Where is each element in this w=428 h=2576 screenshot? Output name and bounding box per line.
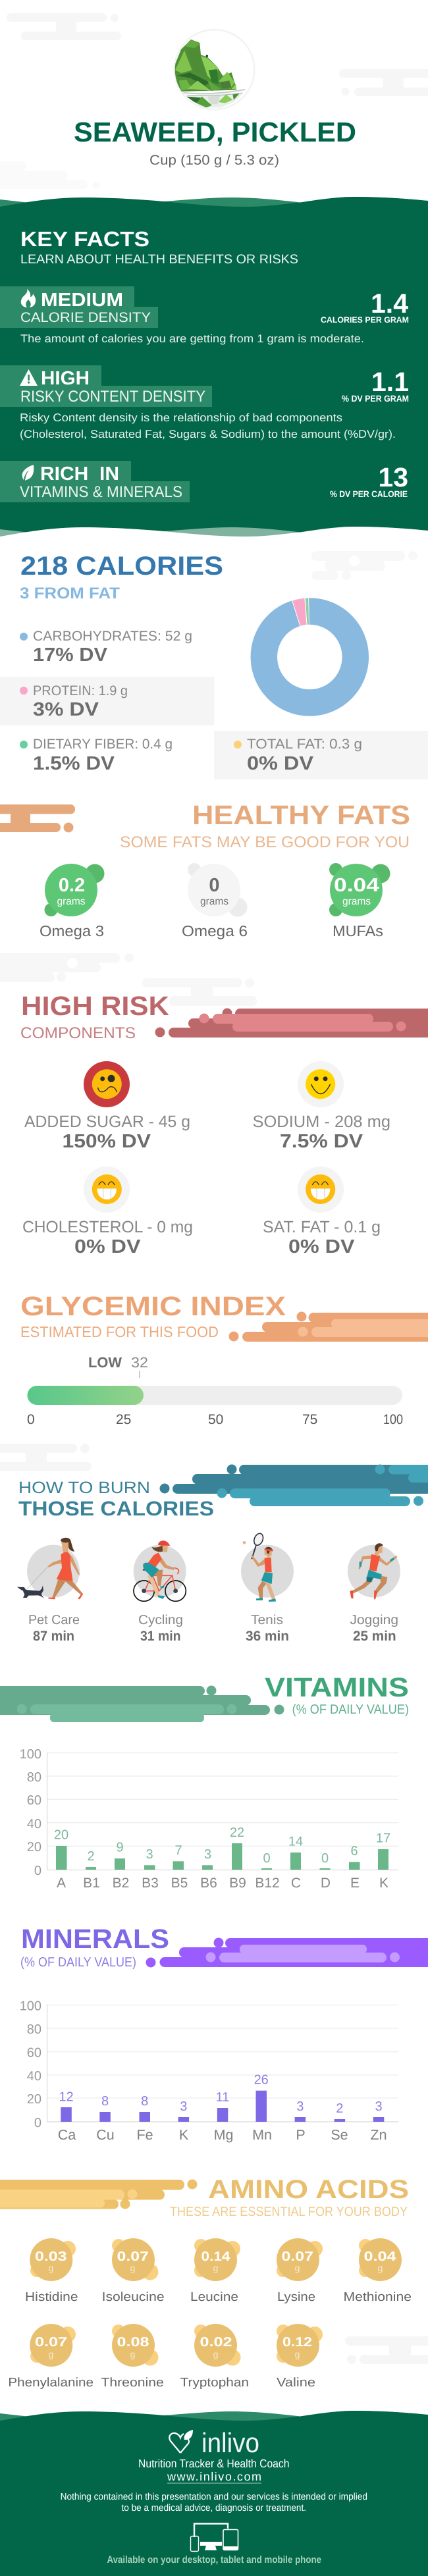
risk: sodium [253,1061,390,1152]
amino: histidine: g [49,2263,53,2273]
fact: rich in vitamins and minerals: VITAMINS & MINERALS [20,483,182,501]
legend: total fat: 0% DV [247,753,314,774]
disclaimer: to be a medical advice, diagnosis or treatment. [121,2503,306,2513]
risk: saturated fat [263,1167,381,1257]
activity: jogging: Jogging [350,1613,398,1627]
amino: lysine: g [295,2263,300,2273]
background cloud: burn [0,1444,92,1471]
amino: histidine: Histidine [25,2290,78,2304]
activity: pet care: 87 min [33,1629,74,1644]
fact: risky content density: (Cholesterol, Saturated Fat, Sugars & Sodium) to the amount (%DV/gr). [20,428,396,440]
amino: isoleucine: Isoleucine [102,2290,165,2304]
amino: histidine: 0.03 [35,2249,67,2264]
legend: dietary fiber [20,737,173,774]
amino: phenylalanine: g [49,2349,53,2359]
bar chart: vitamins: B12 [255,1876,280,1891]
bar chart: vitamins: 22 [230,1826,244,1840]
legend: protein: PROTEIN: 1.9 g [33,683,128,698]
bar chart: vitamins: E [350,1876,360,1891]
panel: high risk [20,991,428,1257]
icon: flame [21,289,36,307]
healthy fats heading: HEALTHY FATS [192,800,410,830]
activity: pet care: Pet Care [28,1613,80,1627]
title: SEAWEED, PICKLED [74,117,356,147]
glycemic index heading: GLYCEMIC INDEX [20,1291,286,1321]
heading [18,1479,214,1520]
bar chart: vitamins: 14 [288,1834,303,1849]
amino: valine [277,2324,323,2390]
legend: carbohydrates: 17% DV [33,644,108,666]
bar chart: minerals: Fe [136,2127,153,2143]
fact: risky content density: % DV PER GRAM [342,394,409,404]
fat: omega 6: Omega 6 [182,922,248,939]
glycemic bar [27,1386,403,1427]
legend: total fat: TOTAL FAT: 0.3 g [247,737,362,752]
legend: protein: 3% DV [33,699,99,720]
bar chart: vitamins: 20 [27,1840,41,1854]
amino acids heading: AMINO ACIDS [208,2175,409,2204]
bar chart: minerals [20,1999,398,2143]
bar chart: vitamins: B3 [142,1876,159,1891]
background cloud: high risk [0,953,257,1006]
fact: risky content density: RISKY CONTENT DENSITY [20,388,205,406]
key facts heading: KEY FACTS [20,227,149,251]
bar chart: vitamins: 3 [146,1847,153,1862]
fat: mufas: MUFAs [333,922,383,939]
bar chart: minerals: 20 [27,2092,41,2107]
bar chart: minerals: 8 [141,2094,148,2109]
bar chart: vitamins: 6 [350,1844,358,1858]
legend: carbohydrates: CARBOHYDRATES: 52 g [33,629,192,644]
amino: tryptophan: g [213,2349,218,2359]
amino: leucine: Leucine [190,2290,238,2304]
icon: woman walking dog [17,1538,83,1599]
bar chart: minerals: 26 [254,2072,269,2087]
fat: omega 3: 0.2 [59,875,85,896]
heading: THOSE CALORIES [18,1497,214,1520]
amino: phenylalanine: Phenylalanine [8,2376,94,2390]
bar chart: minerals: Se [331,2127,348,2143]
fat: mufas: 0.04 [334,875,379,896]
icon: cyclist [134,1540,186,1601]
calories from fat: 3 FROM FAT [20,585,120,602]
amino: methionine: 0.04 [363,2249,397,2264]
fact: risky content density: Risky Content density is the relationship of bad components [20,411,342,424]
bar chart: vitamins [20,1747,398,1891]
risk: added sugar: 150% DV [62,1131,151,1152]
panel: vitamins [0,1672,409,1891]
fact: risky content density: 1.1 [371,367,409,397]
vitamins subheading: (% OF DAILY VALUE) [292,1702,409,1717]
activity: pet care [17,1538,83,1644]
legend: protein [0,677,215,725]
bar chart: minerals: 100 [20,1999,41,2014]
bar chart: vitamins: K [379,1876,388,1891]
amino: lysine: 0.07 [282,2249,313,2264]
fact: rich in vitamins and minerals [0,461,408,502]
bar chart: vitamins: B1 [83,1876,100,1891]
amino acids subheading: THESE ARE ESSENTIAL FOR YOUR BODY [170,2205,408,2219]
header shape [159,1464,428,1506]
risk: added sugar: ADDED SUGAR - 45 g [24,1113,190,1131]
fat: omega 3 [40,864,104,939]
risk: saturated fat: SAT. FAT - 0.1 g [263,1218,381,1236]
panel: calories [0,552,428,779]
bar chart: minerals: 40 [27,2069,41,2084]
panel: food title header [74,30,356,168]
glycemic bar: 100 [383,1412,403,1427]
bar chart: minerals: Ca [58,2127,76,2143]
amino: threonine: Threonine [101,2376,164,2390]
healthy fats subheading: SOME FATS MAY BE GOOD FOR YOU [120,833,410,851]
fact: calorie density: MEDIUM [41,290,123,311]
risk: sodium: SODIUM - 208 mg [253,1113,390,1131]
amino: methionine [344,2238,412,2304]
risk: saturated fat: 0% DV [288,1236,355,1257]
background clouds: header [0,13,428,189]
bar chart: vitamins: 100 [20,1747,41,1762]
icon: heart with leaf [169,2430,193,2453]
background cloud: calories [311,551,417,580]
bar chart: vitamins: 80 [27,1770,41,1785]
glycemic value [88,1354,148,1378]
high risk subheading: COMPONENTS [20,1024,136,1042]
bar chart: minerals: Mn [252,2127,272,2143]
risk: cholesterol [22,1167,193,1257]
risk: added sugar [24,1061,190,1152]
fact: rich in vitamins and minerals: 13 [378,462,408,492]
amino: valine: g [295,2349,300,2359]
bar chart: vitamins: 0 [263,1851,271,1866]
amino: tryptophan: 0.02 [200,2335,232,2350]
amino: methionine: Methionine [344,2290,412,2304]
bar chart: minerals: 2 [336,2101,343,2116]
risk: sodium: 7.5% DV [280,1131,363,1152]
availability note: Available on your desktop, tablet and mobile phone [107,2554,321,2565]
amino: isoleucine: g [130,2263,135,2273]
fact: risky content density [0,365,409,440]
bar chart: vitamins: 17 [376,1831,390,1846]
bar chart: vitamins: B9 [229,1876,246,1891]
activity: tennis: Tenis [251,1613,283,1627]
bar chart: minerals: 3 [296,2099,304,2114]
glycemic value: 32 [131,1354,148,1371]
header shape [0,1685,284,1722]
amino: phenylalanine: 0.07 [35,2335,67,2350]
bar chart: minerals: 80 [27,2022,41,2037]
bar chart: vitamins: 40 [27,1817,41,1831]
amino: threonine: 0.08 [117,2335,149,2350]
activity: cycling [134,1540,186,1644]
amino: valine: Valine [277,2376,315,2390]
bar chart: minerals: 12 [59,2090,74,2104]
glycemic bar: 50 [208,1412,223,1427]
risk: cholesterol: CHOLESTEROL - 0 mg [22,1218,193,1236]
fat: omega 6: grams [200,896,228,907]
bar chart: vitamins: 7 [174,1843,182,1858]
key facts subheading: LEARN ABOUT HEALTH BENEFITS OR RISKS [20,252,298,267]
bar chart: minerals: 3 [180,2099,187,2114]
icon: tennis player [241,1532,294,1602]
vitamins heading: VITAMINS [265,1672,409,1702]
amino: leucine [190,2238,240,2304]
header shape [0,804,75,832]
activity: jogging [348,1543,400,1644]
bar chart: vitamins: B2 [113,1876,129,1891]
header shape [155,1009,428,1038]
amino: tryptophan: Tryptophan [180,2376,249,2390]
bar chart: vitamins: B6 [200,1876,217,1891]
logo: inlivo [201,2427,259,2458]
fat: mufas [329,863,390,939]
fact: calorie density: 1.4 [371,288,408,319]
minerals subheading: (% OF DAILY VALUE) [20,1955,136,1970]
panel: key facts [0,197,428,553]
activity: cycling: 31 min [140,1629,180,1644]
amino: threonine [101,2324,164,2390]
disclaimer: Nothing contained in this presentation and our services is intended or implied [61,2492,367,2502]
fact: rich in vitamins and minerals: % DV PER CALORIE [330,489,408,499]
fat: omega 6: 0 [209,875,220,896]
amino: tryptophan [180,2324,249,2390]
bar chart: minerals: Mg [214,2127,233,2143]
legend: total fat [214,731,428,779]
bar chart: minerals: Cu [96,2127,115,2143]
legend: carbohydrates [20,629,192,666]
bar chart: vitamins: A [57,1876,66,1891]
glycemic value: LOW [88,1354,122,1371]
fact: rich in vitamins and minerals: RICH IN [40,463,119,485]
donut chart [264,598,356,703]
bar chart: vitamins: 0 [321,1851,329,1866]
icon: jogger [348,1543,400,1600]
bar chart: vitamins: D [321,1876,331,1891]
fact: calorie density [0,286,409,345]
bar chart: vitamins: 2 [87,1849,95,1864]
logo [169,2427,259,2458]
fat: omega 6 [182,863,248,939]
amino: isoleucine [102,2238,165,2304]
bar chart: minerals: 3 [375,2099,383,2114]
header shape [146,1938,428,1967]
fact: calorie density: CALORIE DENSITY [20,310,151,325]
panel: minerals [20,1924,428,2143]
minerals heading: MINERALS [21,1924,169,1954]
header shape [229,1311,428,1342]
amino: phenylalanine [8,2324,94,2390]
amino: isoleucine: 0.07 [117,2249,149,2264]
high risk heading: HIGH RISK [21,991,169,1021]
fat: mufas: grams [342,896,371,907]
amino: methionine: g [378,2263,383,2273]
legend: dietary fiber: DIETARY FIBER: 0.4 g [33,737,173,752]
amino: leucine: 0.14 [201,2249,230,2264]
bar chart: vitamins: B5 [171,1876,188,1891]
fat: omega 3: Omega 3 [40,922,104,939]
bar chart: minerals: 8 [101,2094,109,2109]
bar chart: minerals: 0 [34,2116,41,2130]
activity: jogging: 25 min [353,1629,396,1644]
fact: risky content density: HIGH [41,368,90,389]
fact: calorie density: CALORIES PER GRAM [321,315,409,325]
website link: www.inlivo.com [167,2470,261,2483]
wave bottom [0,527,428,553]
bar chart: minerals: Zn [370,2127,387,2143]
bar chart: minerals: P [296,2127,306,2143]
bar chart: minerals: K [179,2127,189,2143]
amino: histidine [25,2238,78,2304]
background cloud: amino [345,2336,428,2364]
panel: how to burn those calories [17,1464,428,1644]
disclaimer [61,2492,367,2513]
amino: lysine: Lysine [277,2290,315,2304]
tagline: Nutrition Tracker & Health Coach [138,2457,290,2470]
bar chart: vitamins: 3 [204,1847,211,1862]
amino: leucine: g [213,2263,218,2273]
glycemic bar: 25 [116,1412,131,1427]
amino: threonine: g [130,2349,135,2359]
header shape [0,2179,198,2209]
activity: cycling: Cycling [138,1613,183,1627]
glycemic index subheading: ESTIMATED FOR THIS FOOD [20,1323,219,1340]
glycemic bar: 0 [27,1412,35,1427]
fact: calorie density: The amount of calories you are getting from 1 gram is moderate. [20,332,364,345]
amino: lysine [277,2238,323,2304]
bar chart: minerals: 60 [27,2046,41,2061]
activity: tennis [241,1532,294,1644]
panel: footer [0,2411,428,2576]
serving size: Cup (150 g / 5.3 oz) [149,153,279,168]
heading: HOW TO BURN [18,1479,150,1497]
bar chart: vitamins: 0 [34,1864,41,1878]
calories heading: 218 CALORIES [20,552,223,581]
legend: dietary fiber: 1.5% DV [33,753,115,774]
panel: glycemic index [20,1291,428,1427]
panel: healthy fats [0,800,410,939]
fat: omega 3: grams [57,896,86,907]
activity: tennis: 36 min [246,1629,289,1644]
bar chart: vitamins: C [291,1876,301,1891]
amino: valine: 0.12 [282,2335,312,2350]
bar chart: vitamins: 20 [54,1827,68,1842]
bar chart: minerals: 11 [216,2090,229,2105]
glycemic bar: 75 [302,1412,317,1427]
icon: warning triangle [20,369,38,386]
risk: cholesterol: 0% DV [74,1236,141,1257]
bar chart: vitamins: 9 [116,1841,124,1855]
icon: seaweed food photo [174,30,254,109]
panel: amino acids [0,2175,412,2390]
icon: devices [191,2524,238,2552]
icon: leaf [22,465,34,481]
bar chart: vitamins: 60 [27,1793,41,1808]
